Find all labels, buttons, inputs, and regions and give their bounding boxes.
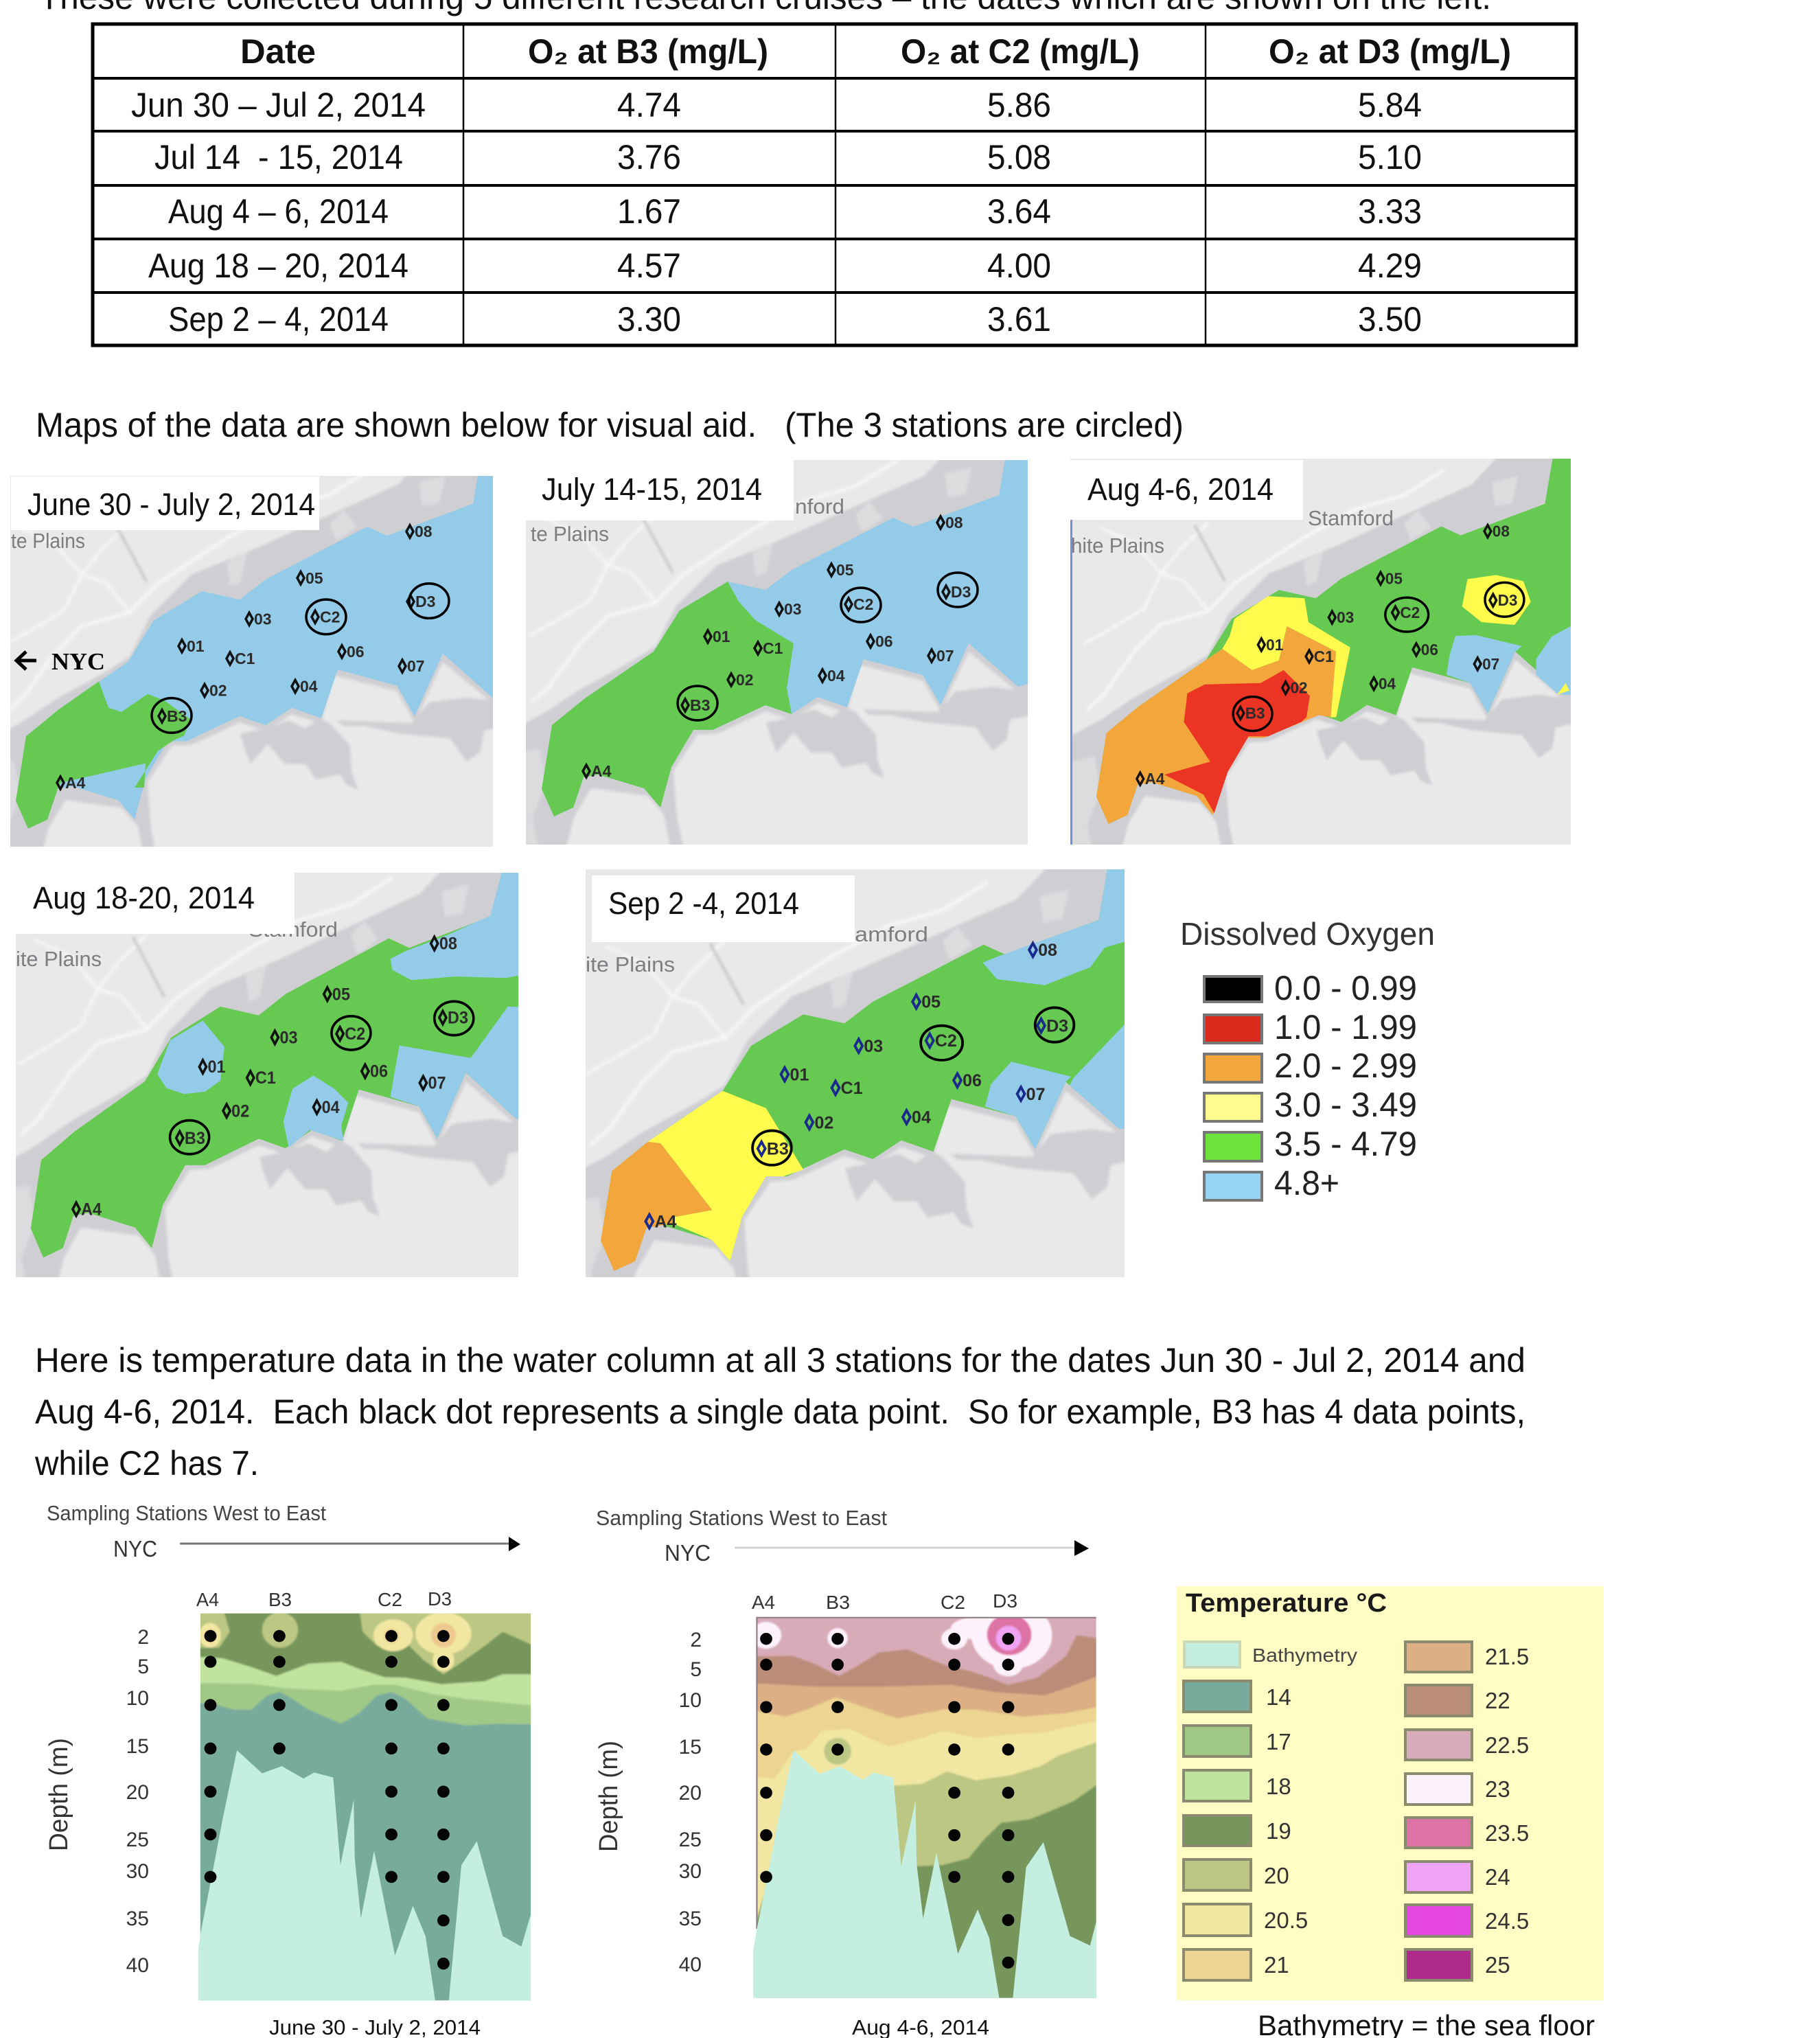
city labels: Stamford [1308,506,1394,530]
depth axis: 40 [679,1954,702,1976]
bathymetry (sea floor) [198,1750,531,2000]
station markers [583,514,971,780]
station markers: A4 [81,1200,102,1220]
depth axis: 20 [679,1782,702,1805]
station markers: 08 [439,935,457,954]
panel: map Sep 2-4 [586,869,1125,1277]
table row: Jul 14 - 15: 5.08 [987,138,1051,176]
basemap [586,869,1125,1277]
depth axis: 25 [126,1829,149,1851]
legend swatches and ranges: 2.0 - 2.99 [1274,1046,1417,1085]
section header and NYC arrow: Sampling Stations West to East [47,1501,326,1525]
station markers: 02 [209,681,227,700]
panel: map Aug 4-6 [1070,459,1571,845]
station markers: 05 [836,561,854,579]
legend swatches and ranges: 3.0 - 3.49 [1274,1086,1417,1124]
legend swatches and ranges [1204,969,1417,1202]
legend swatches left column [1184,1642,1251,1980]
table row: Jun 30 – Jul 2: 4.74 [617,86,681,124]
depth axis: 15 [126,1735,149,1758]
legend labels right column: 21.5 [1485,1644,1529,1669]
legend swatches right column [1405,1642,1472,1980]
station markers: 08 [1493,522,1510,540]
city labels [586,922,928,976]
table row: Aug 4 – 6: 3.64 [987,192,1051,231]
city labels: nford [795,494,844,518]
circled stations [752,1007,1074,1165]
station markers: D3 [415,593,436,610]
station markers: B3 [767,1139,789,1158]
table: dissolved oxygen by date and station [93,24,1576,345]
legend labels left column: Bathymetry [1252,1645,1357,1666]
station markers: 05 [306,569,323,587]
station markers: B3 [1245,704,1265,722]
temperature intro paragraph [34,1341,1525,1482]
panel: temperature section Aug 4-6 [595,1506,1103,2038]
panel: map July 14-15 [526,460,1028,845]
bathymetry (sea floor) [753,1750,1096,1998]
depth axis: 35 [679,1908,702,1930]
station markers: C1 [763,639,783,657]
station markers: D3 [1046,1016,1068,1035]
depth axis: 15 [679,1736,702,1759]
station labels [196,1588,452,1610]
city labels [16,917,338,971]
section header and NYC arrow: NYC [113,1536,157,1561]
city labels: Stamford [249,917,338,941]
table row: Jul 14 - 15: 5.10 [1358,138,1422,176]
basemap [16,873,518,1277]
station markers: C2 [935,1031,957,1051]
station markers [1137,522,1517,788]
legend labels left column: 17 [1266,1729,1291,1754]
station markers: 01 [208,1058,226,1077]
legend swatches and ranges: 3.5 - 4.79 [1274,1125,1417,1163]
city labels: amford [855,922,928,946]
station markers: 01 [187,637,205,655]
date label [16,873,295,934]
section header and NYC arrow: Sampling Stations West to East [596,1506,887,1530]
date label [1070,460,1303,520]
table header row: O₂ at D3 (mg/L) [1269,32,1511,71]
date label: Aug 4-6, 2014 [1087,472,1274,507]
legend swatches and ranges: 1.0 - 1.99 [1274,1008,1417,1046]
table header row: O₂ at C2 (mg/L) [901,32,1140,71]
station markers: 08 [945,514,963,531]
station markers: 02 [736,671,754,689]
date label: July 14-15, 2014 [542,472,762,507]
date label: Sep 2 -4, 2014 [608,886,799,921]
circled stations [152,584,449,733]
station markers: 03 [254,610,272,628]
station markers: C2 [853,595,873,613]
NYC direction arrow [16,648,105,675]
table row: Jun 30 – Jul 2 [131,86,1422,124]
temperature intro paragraph: while C2 has 7. [34,1444,259,1482]
station markers: 08 [1038,941,1057,960]
station markers: 04 [300,677,318,696]
station labels [752,1590,1017,1613]
legend labels right column: 22 [1485,1688,1510,1713]
legend labels right column: 23.5 [1485,1820,1529,1846]
date label: June 30 - July 2, 2014 [27,487,315,522]
data points [760,1633,1014,1969]
city labels: ite Plains [586,952,675,976]
station labels: D3 [428,1588,452,1610]
section header and NYC arrow [47,1501,520,1561]
station markers: 06 [1421,641,1438,659]
station labels: D3 [993,1590,1017,1612]
legend labels left column: 20.5 [1264,1908,1308,1933]
date label [11,477,319,530]
table row: Aug 4 – 6: 1.67 [617,192,681,231]
station markers [645,941,1068,1231]
table row: Aug 4 – 6: Aug 4 – 6, 2014 [168,192,389,231]
legend labels left column: 21 [1264,1952,1289,1978]
legend labels right column: 24.5 [1485,1908,1529,1934]
station markers: C1 [1314,648,1334,665]
temperature intro paragraph: Here is temperature data in the water column at all 3 stations for the dates Jun 30 - Jul 2, 2014 and [35,1341,1525,1379]
station markers: 07 [1482,655,1499,673]
date label [526,460,794,520]
legend labels left column: 18 [1266,1774,1291,1799]
legend labels left column: 14 [1266,1684,1291,1710]
date label: Aug 18-20, 2014 [33,880,255,915]
depth axis: 10 [126,1687,149,1710]
legend labels right column: 24 [1485,1864,1510,1890]
depth axis: 25 [679,1829,702,1851]
circled stations [170,1001,474,1154]
station markers: 04 [1379,675,1396,693]
table row: Jul 14 - 15: Jul 14 - 15, 2014 [154,138,403,176]
oxygen zones [1096,448,1593,824]
city labels: ite Plains [16,947,102,971]
station markers: A4 [65,774,86,792]
station markers: 05 [332,985,350,1004]
station markers: D3 [951,583,971,601]
table row: Aug 18 – 20: 4.29 [1358,247,1422,285]
date label [592,875,855,942]
legend labels right column [1485,1644,1529,1978]
section header and NYC arrow [596,1506,1089,1566]
table row: Jun 30 – Jul 2: Jun 30 – Jul 2, 2014 [131,86,426,124]
table row: Sep 2 – 4: 3.61 [987,300,1051,339]
station markers: 04 [827,667,845,685]
oxygen zones [542,439,1048,816]
table row: Sep 2 – 4: 3.30 [617,300,681,339]
station labels: C2 [378,1589,402,1610]
depth axis: 35 [126,1908,149,1930]
station labels: A4 [752,1592,775,1613]
station labels: B3 [268,1589,292,1610]
station markers: C2 [345,1025,365,1044]
station markers: 01 [1266,636,1283,654]
depth axis [679,1629,702,1976]
depth axis title: Depth (m) [595,1741,623,1852]
depth axis: 2 [690,1629,702,1651]
station markers: D3 [1498,591,1517,609]
legend swatches and ranges: 0.0 - 0.99 [1274,969,1417,1007]
legend title: Dissolved Oxygen [1180,916,1435,952]
station markers: 07 [407,657,425,675]
station markers: 06 [370,1062,388,1081]
temperature intro paragraph: Aug 4-6, 2014. Each black dot represents a single data point. So for example, B3 has 4 data points, [35,1393,1525,1431]
table row: Aug 18 – 20: Aug 18 – 20, 2014 [148,247,408,285]
section header and NYC arrow: NYC [665,1540,711,1566]
NYC direction arrow: NYC [51,648,105,675]
depth axis: 30 [126,1860,149,1883]
station markers: C2 [1400,604,1420,621]
station markers: 06 [875,632,893,650]
depth axis: 5 [137,1656,149,1678]
oxygen zones [16,476,493,829]
legend labels right column: 22.5 [1485,1732,1529,1758]
legend title: Temperature °C [1186,1589,1387,1618]
legend labels right column: 25 [1485,1952,1510,1978]
station markers: A4 [654,1212,677,1231]
table header row [240,32,1511,71]
table header row: Date [240,32,316,71]
table row: Jun 30 – Jul 2: 5.86 [987,86,1051,124]
chart frame lines [757,1618,1096,1929]
station markers: 02 [815,1113,833,1132]
panel: temperature section June 30 - July 2 [45,1501,538,2038]
station markers: 05 [1385,569,1403,587]
depth axis: 5 [690,1658,702,1681]
station labels: A4 [196,1589,219,1610]
basemap [526,460,1028,845]
map left edge line [1070,520,1072,845]
station markers: 02 [1290,679,1308,697]
city label: White Plains: te Plains [11,529,85,553]
station markers: C2 [320,608,340,626]
station markers: 03 [1337,608,1354,626]
city labels [1071,506,1394,558]
station markers: 02 [231,1102,249,1121]
station markers: D3 [448,1009,468,1028]
station markers: C1 [235,650,255,667]
station markers: 03 [280,1029,298,1048]
temperature contour chart [194,1607,538,2006]
station markers: 07 [1026,1085,1046,1104]
station markers: 07 [936,647,954,665]
station markers: 01 [790,1065,809,1084]
station markers: B3 [185,1129,205,1148]
table header row: O₂ at B3 (mg/L) [528,32,768,71]
table row: Sep 2 – 4: Sep 2 – 4, 2014 [168,300,389,339]
station markers: 03 [864,1037,883,1056]
legend labels left column: 19 [1266,1818,1291,1844]
station markers: 01 [713,628,730,645]
station markers: A4 [1145,770,1165,788]
station labels: B3 [826,1592,850,1613]
table row: Jul 14 - 15: 3.76 [617,138,681,176]
depth axis: 2 [137,1626,149,1649]
station markers: 04 [322,1098,340,1117]
legend labels right column: 23 [1485,1776,1510,1802]
oxygen zones [31,855,546,1258]
table row: Sep 2 – 4: 3.50 [1358,300,1422,339]
panel: map June 30 - July 2 [10,476,493,847]
city labels [531,494,844,546]
table row: Aug 18 – 20 [148,247,1422,285]
table row: Aug 4 – 6 [168,192,1422,231]
temperature contour chart [750,1602,1103,2003]
table row: Aug 18 – 20: 4.57 [617,247,681,285]
depth axis: 20 [126,1781,149,1804]
oxygen zones [601,859,1152,1271]
panel: map Aug 18-20 [16,873,518,1277]
table row: Sep 2 – 4 [168,300,1422,339]
station markers: 06 [347,643,365,661]
legend: dissolved oxygen [1180,916,1435,1202]
depth axis: 30 [679,1860,702,1883]
table row: Aug 4 – 6: 3.33 [1358,192,1422,231]
station markers [73,935,468,1220]
legend: temperature [1177,1586,1604,2000]
station markers: B3 [167,707,187,725]
circled stations [678,573,978,720]
station markers: 08 [415,523,433,540]
station markers: 04 [912,1108,931,1127]
station markers: 03 [784,600,802,618]
table row: Aug 18 – 20: 4.00 [987,247,1051,285]
station markers: 05 [921,992,941,1011]
station markers: 07 [428,1074,446,1093]
maps intro text: Maps of the data are shown below for visual aid. (The 3 stations are circled) [36,406,1184,444]
station markers: A4 [591,762,612,780]
legend labels left column [1252,1645,1357,1978]
data points [205,1630,450,1969]
depth axis: 40 [126,1954,149,1977]
basemap [1070,459,1571,845]
legend labels left column: 20 [1264,1863,1289,1888]
station markers: C1 [255,1069,276,1088]
legend swatches and ranges: 4.8+ [1274,1164,1339,1202]
depth axis: 10 [679,1689,702,1712]
station markers: B3 [690,696,710,714]
depth axis [126,1626,149,1977]
station labels: C2 [941,1592,965,1613]
city labels: hite Plains [1071,534,1164,558]
station markers [57,523,436,792]
station markers: C1 [841,1079,863,1098]
depth axis title: Depth (m) [45,1738,73,1851]
table row: Jul 14 - 15 [154,138,1422,176]
station markers: 06 [963,1071,982,1090]
city labels: te Plains [531,522,609,546]
basemap [10,476,493,847]
circled stations [1233,582,1524,731]
table row: Jun 30 – Jul 2: 5.84 [1358,86,1422,124]
